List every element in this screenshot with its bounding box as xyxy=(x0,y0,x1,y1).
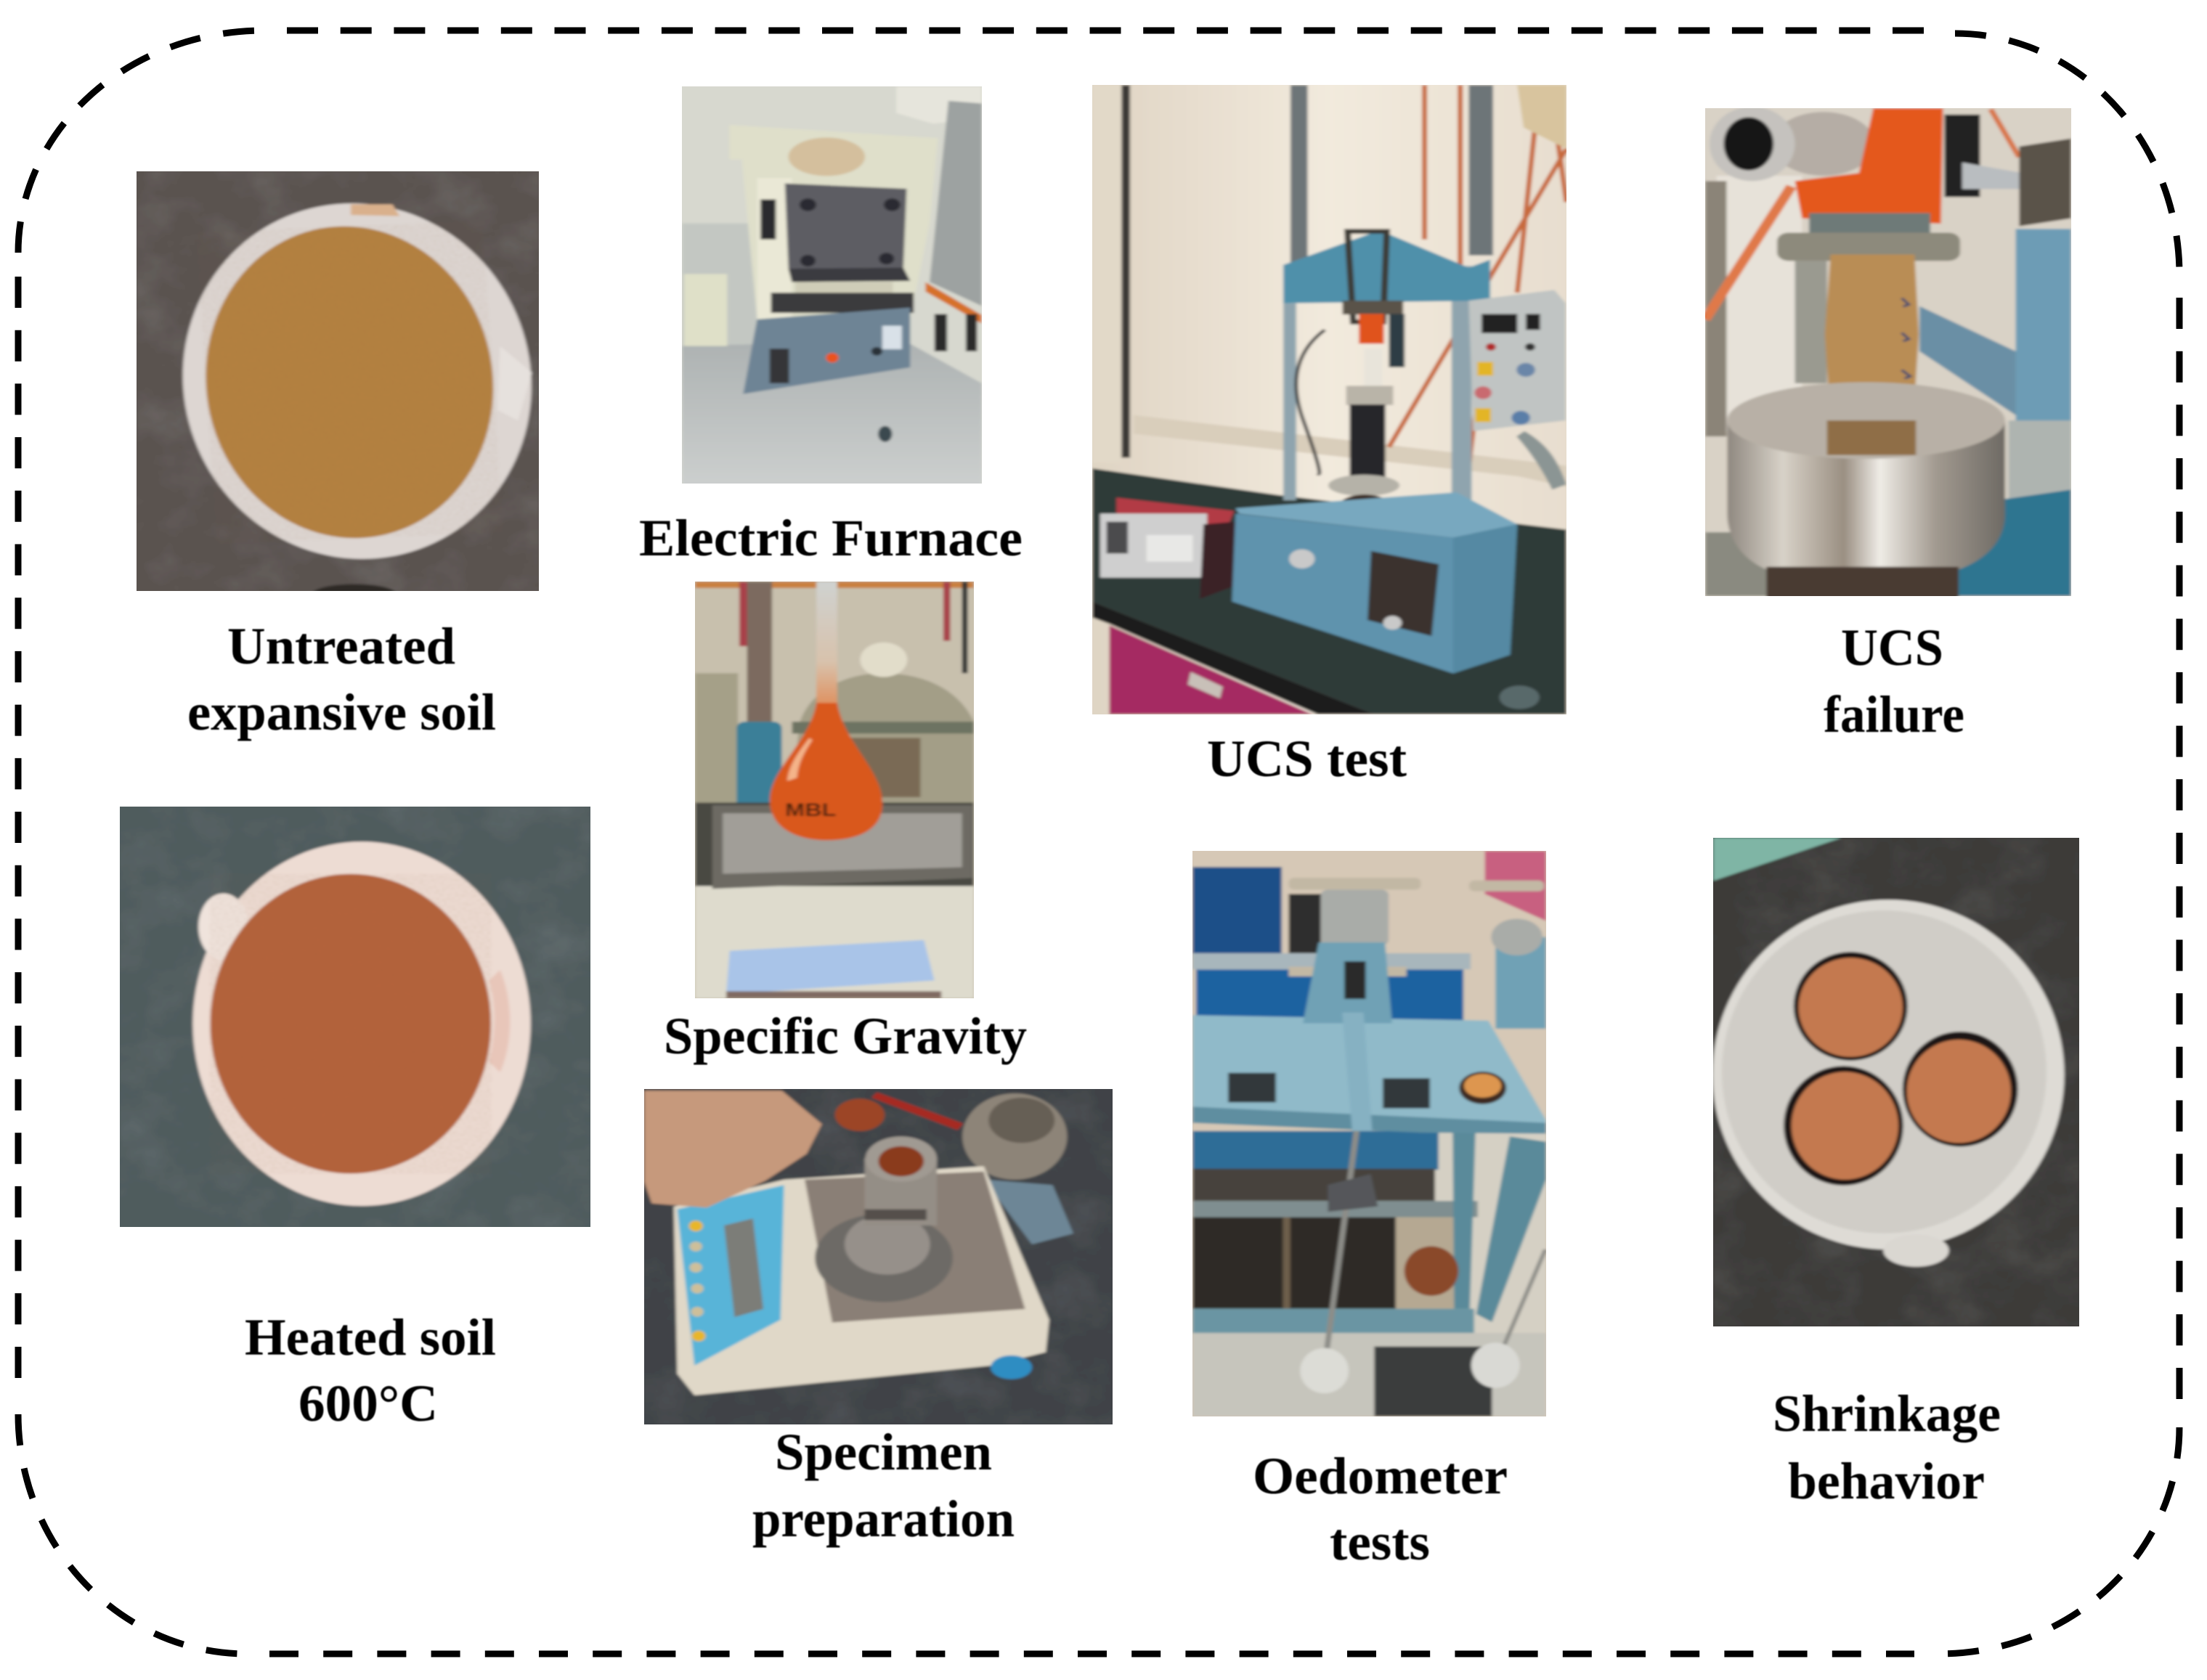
label: heated soil 600°C xyxy=(245,1308,496,1432)
glass jar xyxy=(792,643,974,802)
furnace body xyxy=(729,125,938,442)
failed specimen xyxy=(1825,255,1919,422)
machine base xyxy=(1232,492,1517,674)
label: oedometer tests: tests xyxy=(1330,1513,1430,1571)
photo: UCS test machine xyxy=(1092,85,1566,714)
balance xyxy=(695,805,974,998)
load frame xyxy=(1283,230,1490,535)
label: oedometer tests: Oedometer xyxy=(1253,1447,1508,1505)
label: UCS failure: UCS xyxy=(1841,619,1943,677)
photo: electric furnace xyxy=(682,86,982,484)
label: electric furnace: Electric Furnace xyxy=(639,509,1023,567)
labels xyxy=(187,509,2001,1571)
photo: oedometer test frame xyxy=(1192,851,1546,1416)
pink cabinet xyxy=(1110,626,1312,714)
label: shrinkage behavior: Shrinkage xyxy=(1773,1385,2001,1443)
dish xyxy=(171,197,543,566)
label: UCS failure: failure xyxy=(1824,685,1964,743)
label: specific gravity: Specific Gravity xyxy=(664,1007,1027,1065)
specimen 3 xyxy=(1784,1066,1903,1186)
label: specimen preparation: preparation xyxy=(752,1490,1015,1548)
label: oedometer tests xyxy=(1253,1447,1508,1571)
control box xyxy=(1468,290,1566,489)
slotted weights xyxy=(1228,1073,1430,1109)
steel fitting xyxy=(1710,107,1874,181)
table top xyxy=(1192,1015,1546,1131)
photo: specimen preparation on scale xyxy=(644,1089,1113,1424)
loading plate xyxy=(1777,232,1960,261)
label: untreated expansive soil xyxy=(187,617,496,741)
photo: heated soil 600°C xyxy=(120,807,590,1227)
balance xyxy=(674,1166,1049,1395)
photo: untreated expansive soil xyxy=(137,171,539,591)
photo: UCS failure specimen xyxy=(1705,108,2071,596)
metal bowl xyxy=(962,1093,1067,1180)
dish xyxy=(193,841,531,1206)
flask: MBL xyxy=(785,800,837,820)
label: specimen preparation xyxy=(752,1423,1015,1548)
steel cylinder xyxy=(1727,382,2005,569)
chart recorder xyxy=(1100,497,1235,599)
label: untreated expansive soil: expansive soil xyxy=(187,683,496,741)
hanger rods xyxy=(1300,1131,1545,1393)
compaction mold xyxy=(815,1136,953,1302)
specimen 2 xyxy=(1903,1032,2018,1146)
label: untreated expansive soil: Untreated xyxy=(227,617,455,675)
photo: shrinkage specimens in dish xyxy=(1713,838,2079,1326)
label: specimen preparation: Specimen xyxy=(775,1423,992,1481)
soil xyxy=(195,221,503,544)
copper bowl xyxy=(1405,1247,1458,1296)
loading stands xyxy=(1289,878,1546,1131)
hand xyxy=(644,1090,822,1207)
label: shrinkage behavior xyxy=(1773,1385,2001,1510)
dish xyxy=(1712,900,2064,1267)
photo: specific gravity flask on balance xyxy=(695,582,974,998)
label: shrinkage behavior: behavior xyxy=(1788,1452,1985,1510)
label: UCS failure xyxy=(1824,619,1964,743)
soil xyxy=(210,874,491,1174)
flask xyxy=(770,582,882,840)
label: heated soil 600°C: 600°C xyxy=(298,1374,438,1432)
bench xyxy=(1092,468,1566,714)
floor and shelf xyxy=(1192,1131,1546,1416)
specimen 1 xyxy=(1794,952,1908,1061)
orange loading head xyxy=(1795,108,1943,224)
label: heated soil 600°C: Heated soil xyxy=(245,1308,496,1366)
label: UCS test: UCS test xyxy=(1207,730,1407,788)
